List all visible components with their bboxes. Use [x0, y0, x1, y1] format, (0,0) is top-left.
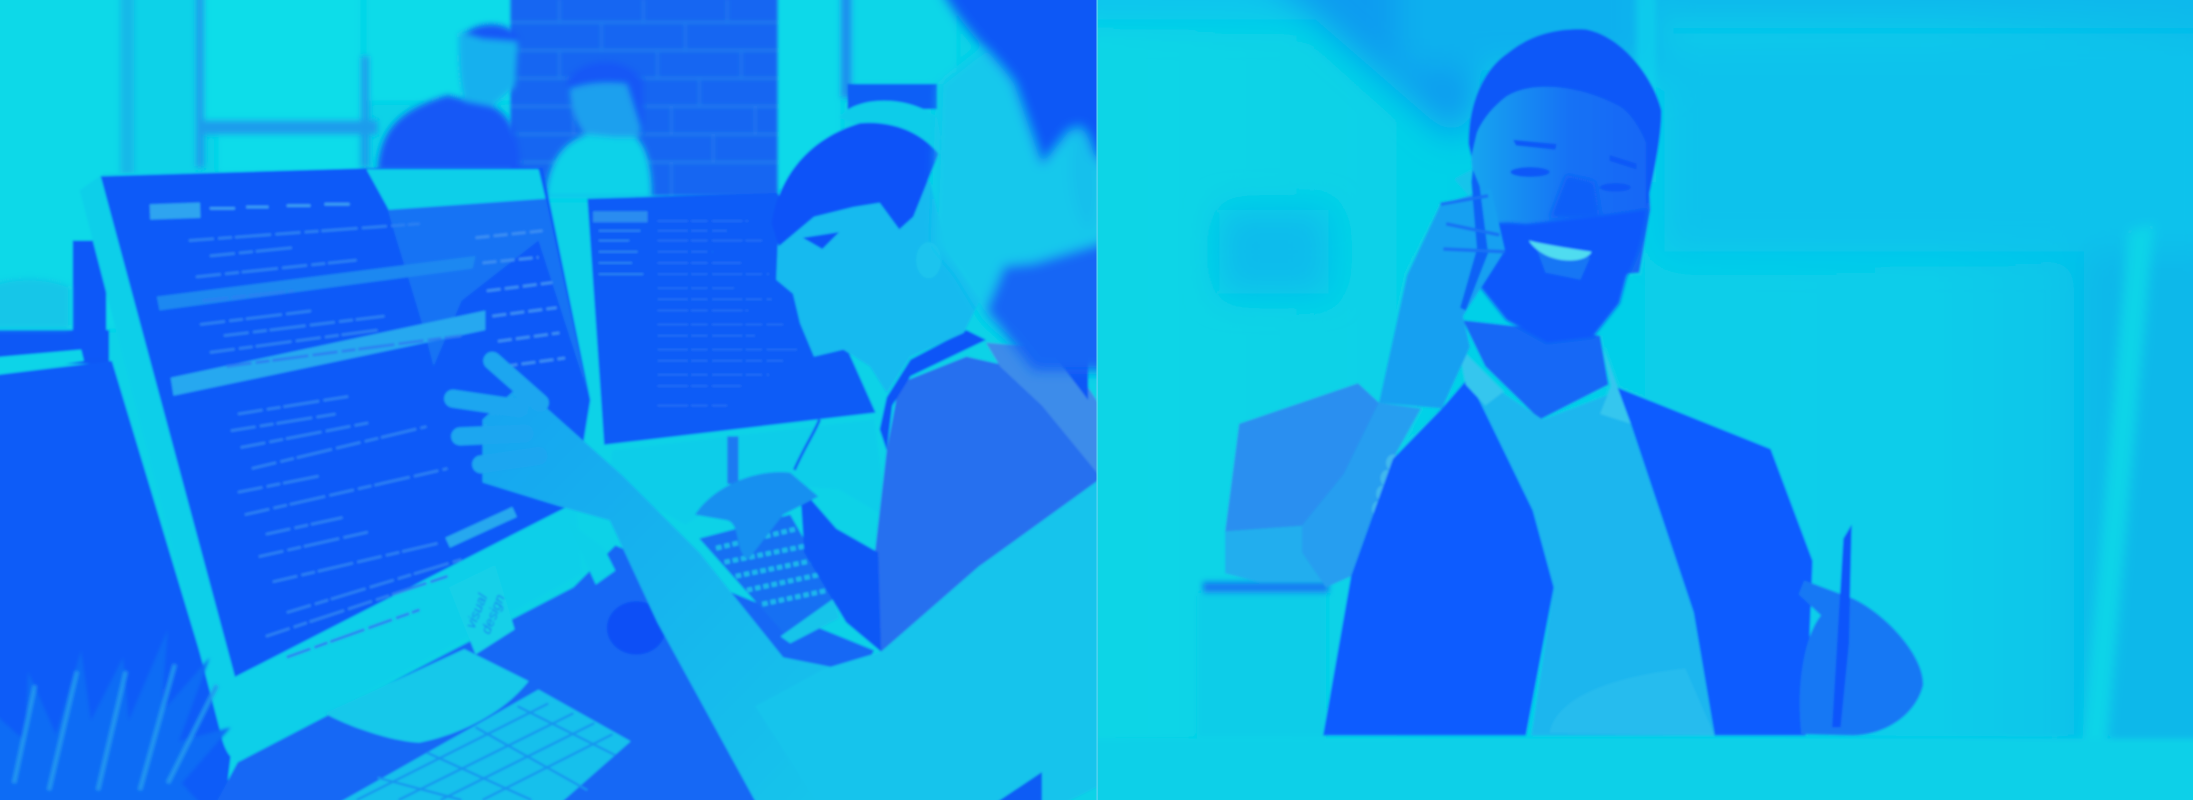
bottom keyboard — [319, 690, 631, 800]
desk surface — [210, 545, 874, 800]
woman: hand — [695, 472, 818, 559]
man: jacket dark panels — [1323, 378, 1813, 736]
man: nose shadow — [1550, 175, 1600, 218]
monitor stand and cables — [614, 418, 882, 516]
left desk and back of monitor — [0, 241, 231, 800]
man: shirt — [1455, 347, 1715, 736]
panel: businessman on phone photo — [1063, 0, 2193, 800]
second monitor — [587, 193, 876, 445]
background office windows — [0, 0, 957, 329]
sticky note: visual design: visual — [462, 591, 491, 630]
man: jacket far shoulder — [1225, 383, 1421, 587]
woman: sweater — [874, 357, 1105, 652]
man: pen and holding hand — [1799, 524, 1923, 736]
bottom desk edge — [1070, 738, 2193, 800]
divider line between photos — [1096, 0, 1098, 800]
desk divider block — [1197, 582, 1329, 738]
foreground man: head — [934, 0, 1119, 371]
woman: hair — [772, 123, 938, 246]
main monitor — [80, 168, 592, 761]
sticky note: visual design — [449, 565, 515, 655]
plant — [0, 629, 231, 800]
man: eyes and brows — [1510, 140, 1636, 192]
blurred office background — [1098, 0, 2193, 738]
window frame behind woman — [848, 84, 937, 109]
woman: arm — [800, 487, 881, 652]
woman: face and neck — [774, 180, 980, 392]
man: face — [1470, 80, 1650, 287]
man: beard and smile — [1480, 210, 1646, 343]
man: neck — [1463, 320, 1608, 420]
sticky note: visual design: design — [477, 592, 508, 636]
right background panel edge — [2082, 226, 2154, 740]
brick wall — [510, 0, 778, 196]
man: hair — [1469, 29, 1662, 210]
foreground man: arm and hand — [442, 350, 830, 800]
woman: hair bun highlight — [839, 101, 945, 161]
woman: eye — [803, 232, 839, 249]
woman: body — [695, 101, 1105, 652]
background person: man — [378, 24, 520, 171]
monitor foot — [324, 649, 529, 743]
mouse and keyboard on desk — [607, 515, 839, 655]
foreground man: torso — [830, 480, 1096, 800]
panel: developers at monitors photo — [0, 0, 1133, 800]
man: raised hand holding phone — [1379, 169, 1505, 408]
woman: ear — [916, 242, 941, 278]
background person: woman — [545, 62, 652, 199]
